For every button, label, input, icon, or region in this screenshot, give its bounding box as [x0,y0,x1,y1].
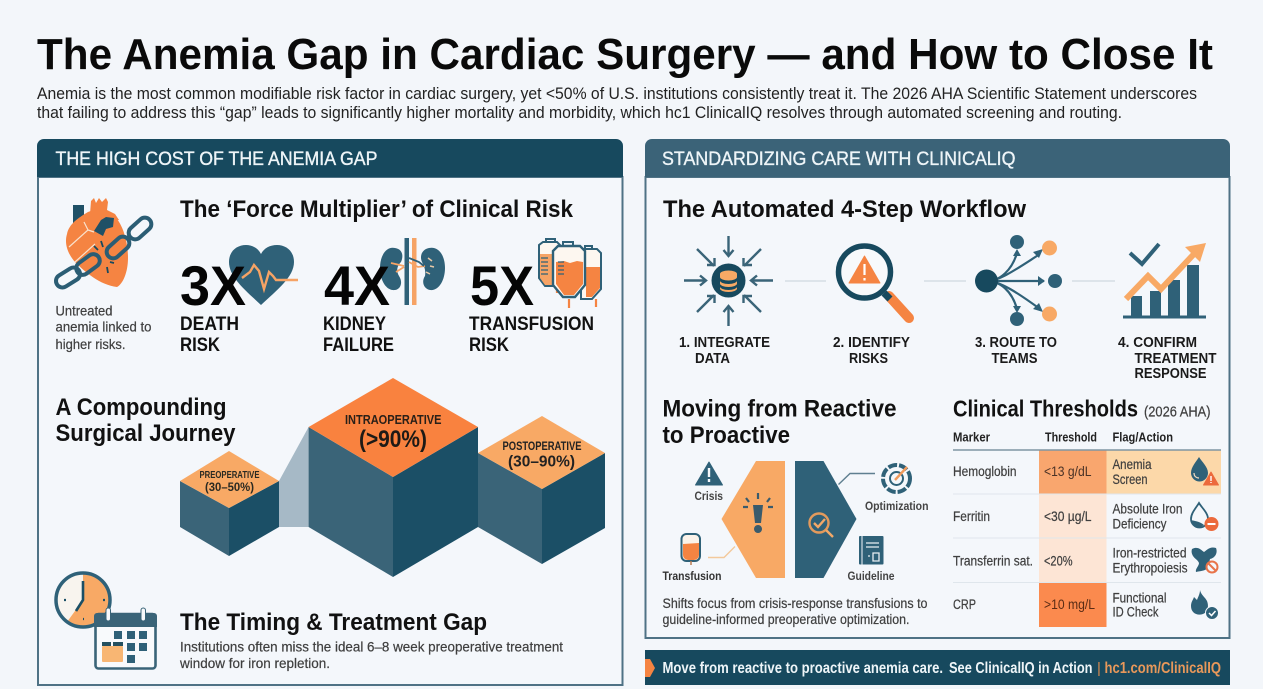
block: preoperative: PREOPERATIVE [200,470,260,481]
heading: reactive to proactive [662,396,896,449]
call to action banner: See ClinicalIQ in Action [949,660,1092,677]
block: postoperative: (30–90%) [508,454,575,470]
panel heading: standardizing care: STANDARDIZING CARE WITH CLINICALIQ [662,149,1016,170]
stat: 5X transfusion risk: 5X [470,254,534,317]
heading: force multiplier: The ‘Force Multiplier’ of Clinical Risk [180,196,573,223]
text: timing gap description [179,638,563,671]
text: shift description: Shifts focus from crisis-response transfusions to [662,596,928,611]
block: intraoperative: INTRAOPERATIVE [345,412,442,427]
stat: 5X transfusion risk: TRANSFUSION [469,313,594,335]
row: transferrin saturation: Iron-restricted [1112,546,1186,560]
heading: timing and treatment gap: The Timing & Treatment Gap [180,609,487,636]
block: preoperative: (30–50%) [205,482,254,494]
heading: 4-step workflow: The Automated 4-Step Workflow [663,196,1027,223]
intro text: Anemia is the most common modifiable risk factor in cardiac surgery, yet <50% of U.S. institutions consistently treat it. The 2026 AHA Scientific Statement underscores [37,85,1197,103]
block: postoperative [478,416,605,564]
icon: crisis warning [694,462,723,503]
row: hemoglobin: <13 g/dL [1044,464,1092,479]
label: step 2: 2. IDENTIFY [833,335,910,351]
icon: guideline book: Guideline [848,569,895,583]
stat: 5X transfusion risk [469,254,594,356]
icon: guideline book [848,536,895,583]
heading: compounding surgical journey: A Compounding [56,394,226,421]
table header: Threshold [1045,430,1097,444]
block: postoperative: POSTOPERATIVE [502,439,582,453]
stat: 3X death risk: 3X [180,254,246,317]
heading: reactive to proactive: to Proactive [662,422,790,449]
icon: transfusion bag [662,534,722,583]
icon: transfusion bag: Transfusion [662,569,722,583]
icon: optimization gauge [865,465,928,513]
text: timing gap description: window for iron repletion. [179,655,330,671]
label: step 2: RISKS [849,351,888,367]
stat: 5X transfusion risk: RISK [469,334,509,356]
diagram: reactive to proactive hexagon [708,461,875,578]
text: untreated anemia note: Untreated [56,302,112,318]
block: intraoperative: (>90%) [359,426,427,453]
label: step 1 [679,335,770,367]
row: transferrin saturation: Transferrin sat. [953,554,1033,568]
row: transferrin saturation: Erythropoiesis [1112,560,1188,576]
heading: clinical thresholds: (2026 AHA) [1144,404,1210,420]
block: preoperative [180,451,279,556]
icon: kidneys [380,238,445,305]
icon: confirm treatment response chart [1123,243,1206,317]
chart: surgical journey blocks [180,378,605,577]
heading: clinical thresholds: Clinical Thresholds [953,396,1138,422]
panel: standardizing care with clinicaliq [645,139,1230,638]
row: hemoglobin: Hemoglobin [953,464,1016,479]
label: step 4: TREATMENT [1134,351,1217,367]
label: step 3: TEAMS [992,351,1038,367]
stat: 3X death risk: DEATH [180,313,239,335]
icon: blood bags [539,239,601,308]
row: crp: >10 mg/L [1044,597,1095,612]
reactive half [722,461,785,578]
row: ferritin: Absolute Iron [1112,502,1182,516]
row: ferritin: <30 µg/L [1044,509,1092,524]
heading: compounding surgical journey: Surgical Journey [56,420,236,447]
icon: route to teams [975,235,1062,326]
call to action banner: Move from reactive to proactive anemia care. [662,660,943,677]
icon: integrate data [684,236,773,326]
text: shift description [662,596,928,627]
text: timing gap description: Institutions often miss the ideal 6–8 week preoperative treatment [180,638,563,654]
row: transferrin saturation: <20% [1044,554,1072,568]
stat: 4X kidney failure: 4X [324,254,390,317]
row: ferritin [953,502,1218,532]
stat: 3X death risk: RISK [180,334,220,356]
label: step 1: DATA [695,351,730,367]
icon: heart with broken chain [54,198,154,290]
block: intraoperative [309,378,478,577]
icon: crisis warning: Crisis [694,489,723,503]
label: step 1: 1. INTEGRATE [679,335,770,351]
icon: heart with pulse [229,245,298,305]
heading: compounding surgical journey [56,394,236,447]
title: The Anemia Gap in Cardiac Surgery — and How to Close It [37,30,1213,79]
call to action banner: hc1.com/ClinicalIQ [1104,660,1221,677]
proactive half [795,461,856,578]
label: step 3: 3. ROUTE TO [975,335,1057,351]
intro text [37,85,1197,122]
stat: 4X kidney failure: FAILURE [323,334,394,356]
text: untreated anemia note: anemia linked to [56,318,152,334]
row: ferritin: Ferritin [953,509,990,524]
row: hemoglobin: Screen [1112,472,1148,487]
row: crp: CRP [953,597,976,612]
stat: 4X kidney failure [323,254,394,356]
label: step 3 [975,335,1057,367]
icon: clock and calendar [56,573,157,668]
heading: reactive to proactive: Moving from Reactive [662,396,896,422]
text: untreated anemia note: higher risks. [56,336,126,352]
text: untreated anemia note [56,302,152,352]
label: step 4: RESPONSE [1134,366,1207,382]
intro text: that failing to address this “gap” leads to significantly higher mortality and morbidity, which hc1 ClinicalIQ resolves through automated screening and routing. [37,104,1122,122]
text: shift description: guideline-informed preoperative optimization. [662,612,910,627]
label: step 4 [1118,335,1217,382]
panel heading: high cost: THE HIGH COST OF THE ANEMIA GAP [56,149,378,170]
row: hemoglobin [953,457,1218,487]
label: step 4: 4. CONFIRM [1118,335,1197,351]
row: transferrin saturation [953,546,1218,576]
stat: 4X kidney failure: KIDNEY [323,313,386,335]
row: crp: ID Check [1112,604,1159,620]
row: hemoglobin: Anemia [1112,457,1152,472]
label: step 2 [833,335,910,367]
call to action banner [645,650,1230,685]
icon: optimization gauge: Optimization [865,499,928,513]
stat: 3X death risk [180,254,246,356]
row: ferritin: Deficiency [1112,516,1167,532]
row: crp: Functional [1112,590,1166,606]
table header [953,430,1173,444]
row: crp [953,590,1218,620]
table header: Flag/Action [1112,430,1173,444]
call to action banner: | [1097,660,1101,677]
icon: identify risks magnifier [838,246,909,318]
panel: high cost of the anemia gap [37,139,623,685]
table header: Marker [953,430,990,444]
table: clinical thresholds [953,430,1221,627]
